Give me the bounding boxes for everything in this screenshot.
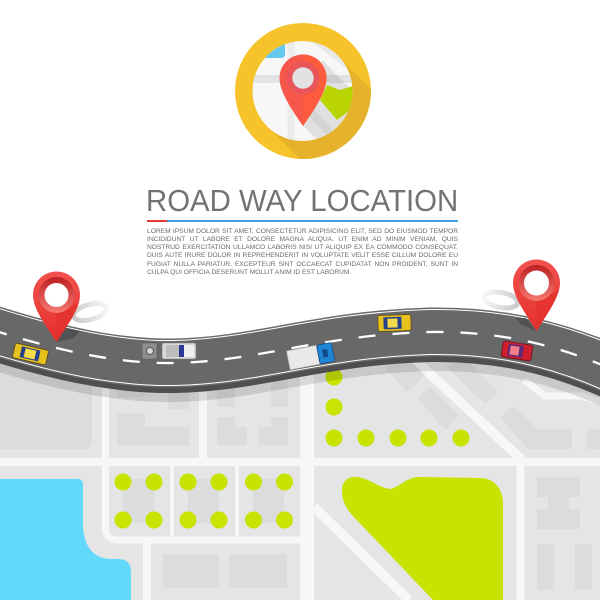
lake: [0, 479, 131, 600]
left location pin: [33, 271, 80, 342]
body paragraph: FUGIAT NULLA PARIATUR. EXCEPTEUR SINT OCCAECAT CUPIDATAT NON PROIDENT, SUNT IN: [147, 260, 458, 268]
yellow ring: [235, 23, 371, 159]
park: [342, 477, 503, 600]
title underline: [147, 220, 458, 222]
white box truck with blue cab: [287, 342, 335, 370]
mini map disc: [252, 41, 352, 141]
map ground: [0, 326, 600, 600]
yellow taxi right: [378, 314, 411, 332]
road: [0, 326, 600, 385]
title: ROAD WAY LOCATION: [146, 184, 458, 218]
grey trailer: [142, 343, 157, 359]
badge icon: map pin in yellow ring: [235, 23, 371, 159]
body paragraph: CULPA QUI OFFICIA DESERUNT MOLLIT ANIM ID EST LABORUM.: [147, 269, 351, 276]
body paragraph: NOSTRUD EXERCITATION ULLAMCO LABORIS NISI UT ALIQUIP EX EA COMMODO CONSEQUAT.: [147, 244, 458, 251]
mini map pin: [280, 54, 326, 126]
body paragraph: LOREM IPSUM DOLOR SIT AMET, CONSECTETUR ADIPISICING ELIT, SED DO EIUSMOD TEMPOR: [147, 228, 458, 235]
city map: [0, 326, 600, 600]
map streets: [0, 340, 600, 600]
body paragraph: INCIDIDUNT UT LABORE ET DOLORE MAGNA ALIQUA. UT ENIM AD MINIM VENIAM, QUIS: [147, 236, 458, 243]
green tree dots: [114, 368, 470, 528]
road centre dashes: [0, 326, 600, 373]
red car: [501, 341, 533, 361]
right pin shadow: [483, 290, 536, 331]
map buildings: [0, 340, 600, 590]
white pickup truck: [162, 343, 196, 359]
body paragraph: [147, 228, 458, 276]
body paragraph: DUIS AUTE IRURE DOLOR IN REPREHENDERIT IN VOLUPTATE VELIT ESSE CILLUM DOLORE EU: [147, 252, 458, 259]
yellow taxi left: [12, 343, 49, 365]
left pin shadow: [56, 300, 108, 342]
right location pin: [513, 260, 560, 331]
